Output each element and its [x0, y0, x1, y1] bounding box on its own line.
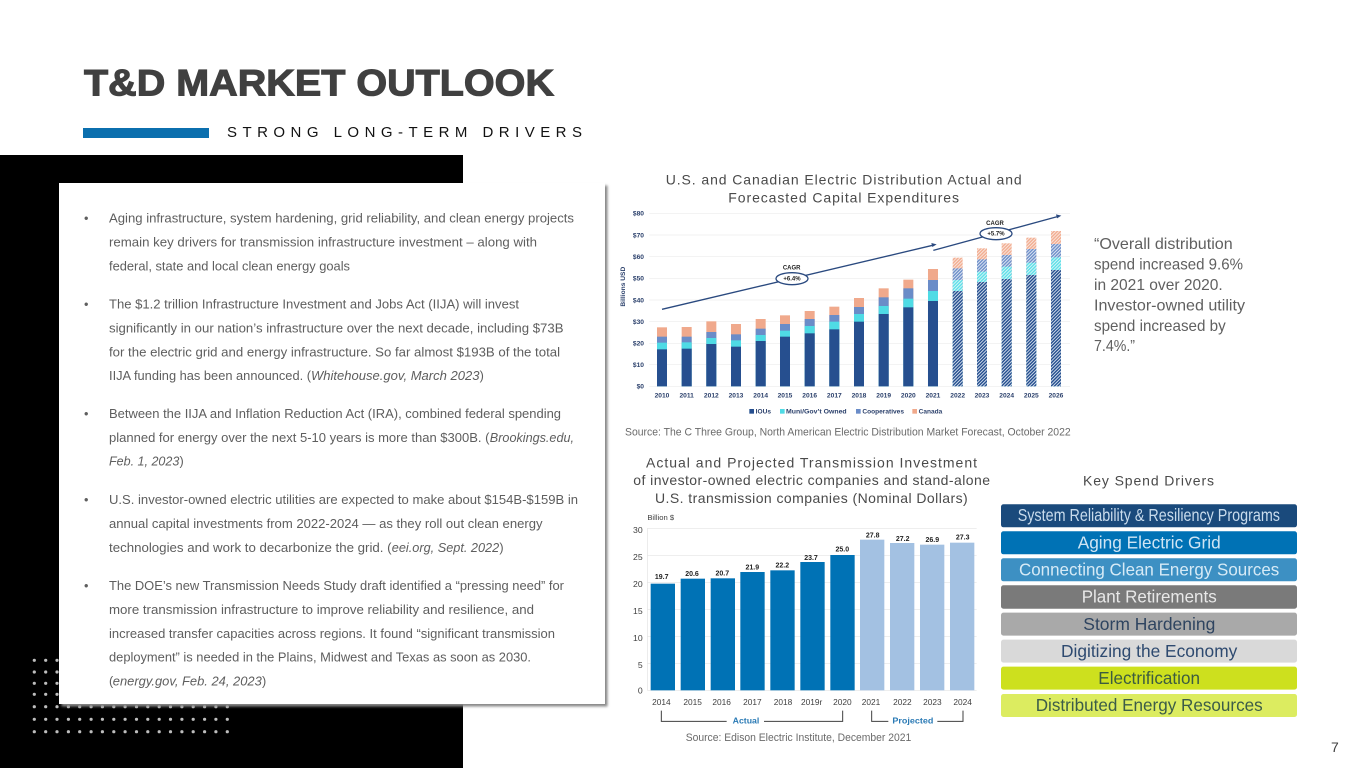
x axis labels — [652, 697, 972, 707]
subtitle: STRONG LONG-TERM DRIVERS — [227, 124, 582, 141]
bullet: IIJA: The $1.2 trillion Infrastructure Investment and Jobs Act (IIJA) will invest — [109, 298, 519, 312]
bar values: 21.9 — [746, 564, 759, 571]
driver 4 — [1001, 585, 1297, 609]
x axis labels: 2012 — [704, 393, 719, 400]
CAGR callout 6.4%: +6.4% — [783, 277, 801, 283]
bullet: IIJA and IRA: • — [84, 407, 88, 421]
bullet: IIJA and IRA — [84, 407, 574, 469]
heading: transmission chart: U.S. transmission companies (Nominal Dollars) — [655, 490, 968, 506]
bar values: 26.9 — [926, 537, 939, 544]
source: distribution chart: Source: The C Three Group, North American Electric Distribution Market Forecast, October 2022 — [625, 427, 1071, 439]
y axis labels: $40 — [633, 297, 644, 304]
x axis labels: 2026 — [1049, 393, 1064, 400]
accent bar — [83, 128, 209, 138]
x axis labels: 2016 — [802, 393, 817, 400]
y axis labels — [633, 525, 643, 695]
driver 5 — [1001, 613, 1297, 636]
chart: transmission investment — [633, 513, 977, 726]
bullet: IIJA — [84, 298, 564, 383]
bullet: aging infrastructure: Aging infrastructure, system hardening, grid reliability, and clean energy projects — [109, 212, 574, 226]
CAGR callout 5.7% — [980, 221, 1012, 240]
bullet: aging infrastructure — [84, 212, 574, 274]
x axis labels: 2021 — [862, 697, 881, 707]
bracket: actual — [661, 711, 843, 726]
x axis labels: 2011 — [679, 393, 694, 400]
x axis labels: 2019 — [876, 393, 891, 400]
driver 4: Plant Retirements — [1082, 587, 1217, 607]
y axis labels: $10 — [633, 362, 644, 369]
bullet: DOE study: more transmission infrastructure to improve reliability and resilience, and — [109, 603, 534, 617]
y axis labels: 0 — [638, 685, 643, 695]
quote callout — [1094, 236, 1245, 355]
bullet: IIJA: for the electric grid and energy infrastructure. So far almost $193B of the total — [109, 345, 560, 359]
heading: distribution chart — [666, 171, 1022, 206]
x axis labels: 2015 — [683, 697, 702, 707]
bullet: IIJA: significantly in our nation’s infrastructure over the next decade, including $73B — [109, 322, 564, 336]
legend: Muni/Gov’t Owned — [786, 409, 847, 416]
bracket: actual: Actual — [733, 716, 759, 726]
x axis labels: 2016 — [712, 697, 731, 707]
x axis labels: 2013 — [729, 393, 744, 400]
heading: transmission chart — [633, 455, 990, 506]
x axis labels: 2015 — [778, 393, 793, 400]
bullet: IIJA: IIJA funding has been announced. ( — [109, 369, 312, 383]
bullet: DOE study: increased transfer capacities across regions. It found “significant transmission — [109, 627, 555, 641]
panel: key drivers text — [59, 183, 605, 704]
bar values — [655, 532, 970, 581]
bar values: 22.2 — [776, 563, 789, 570]
heading: distribution chart: Forecasted Capital Expenditures — [728, 190, 959, 206]
bullet: investor-owned utilities: U.S. investor-owned electric utilities are expected to make about $154B-$159B in — [109, 493, 578, 507]
y axis labels: $80 — [633, 211, 644, 218]
driver 6 — [1001, 640, 1297, 663]
CAGR callout 5.7%: CAGR — [986, 221, 1004, 227]
legend — [749, 409, 943, 416]
driver 8: Distributed Energy Resources — [1036, 695, 1263, 715]
bar values: 27.8 — [866, 532, 880, 539]
x axis labels: 2018 — [774, 697, 793, 707]
x axis labels: 2022 — [893, 697, 912, 707]
bullet: DOE study — [84, 579, 565, 689]
bar values: 27.3 — [956, 534, 970, 541]
bullet: IIJA: Whitehouse.gov, March 2023 — [311, 369, 480, 383]
quote callout: spend increased 9.6% — [1094, 256, 1243, 273]
driver 2 — [1001, 531, 1297, 554]
bracket: projected: Projected — [892, 716, 933, 726]
y axis labels: 25 — [633, 552, 643, 562]
driver 3: Connecting Clean Energy Sources — [1019, 560, 1280, 580]
x axis labels: 2017 — [743, 697, 762, 707]
x axis labels: 2024 — [999, 393, 1014, 400]
actual bars — [657, 269, 938, 386]
x axis labels: 2018 — [852, 393, 867, 400]
bullet: investor-owned utilities — [84, 493, 578, 555]
driver 7 — [1001, 667, 1297, 690]
dot pattern — [33, 659, 229, 733]
heading: transmission chart: Actual and Projected Transmission Investment — [646, 455, 977, 471]
source: transmission chart: Source: Edison Electric Institute, December 2021 — [686, 732, 911, 744]
forecast hatched bars — [953, 231, 1061, 386]
driver 6: Digitizing the Economy — [1061, 641, 1238, 661]
y axis labels: $20 — [633, 341, 644, 348]
bracket: projected — [872, 711, 963, 726]
bullet: DOE study: deployment” is needed in the Plains, Midwest and Texas as soon as 2030. — [109, 651, 531, 665]
trend arrow 2022-2026 — [933, 214, 1061, 250]
bullet: IIJA and IRA: ) — [180, 455, 184, 469]
x axis labels: 2014 — [652, 697, 671, 707]
driver 1: System Reliability & Resiliency Programs — [1018, 505, 1280, 525]
unit label: Billion $ — [647, 513, 675, 522]
y axis labels: 15 — [633, 606, 643, 616]
y axis labels: $60 — [633, 254, 644, 261]
x axis labels: 2020 — [901, 393, 916, 400]
x axis labels: 2022 — [950, 393, 965, 400]
x axis labels: 2021 — [926, 393, 941, 400]
bar values: 20.7 — [716, 571, 729, 578]
driver 5: Storm Hardening — [1083, 614, 1215, 634]
bar values: 20.6 — [685, 571, 699, 578]
driver 2: Aging Electric Grid — [1078, 532, 1221, 552]
heading: Key Spend Drivers — [1083, 473, 1214, 489]
CAGR callout 6.4%: CAGR — [783, 266, 801, 272]
bullet: IIJA and IRA: Brookings.edu, — [490, 431, 574, 445]
panel: key spend drivers — [1001, 473, 1297, 717]
quote callout: Investor-owned utility — [1094, 298, 1245, 315]
bullet: aging infrastructure: federal, state and local clean energy goals — [109, 260, 350, 274]
x axis labels: 2020 — [833, 697, 852, 707]
bullet: investor-owned utilities: ) — [499, 541, 504, 555]
y axis labels — [633, 211, 644, 391]
heading: distribution chart: U.S. and Canadian Electric Distribution Actual and — [666, 171, 1022, 187]
bullet: DOE study: ) — [262, 675, 266, 689]
bar values: 27.2 — [896, 536, 910, 543]
bar values: 23.7 — [804, 555, 818, 562]
bullet: investor-owned utilities: • — [84, 493, 88, 507]
legend: Cooperatives — [862, 409, 904, 416]
y axis labels: $30 — [633, 319, 644, 326]
legend: IOUs — [756, 409, 771, 416]
quote callout: “Overall distribution — [1094, 236, 1233, 253]
x axis labels: 2019r — [801, 697, 823, 707]
y axis labels: $70 — [633, 232, 644, 239]
bullet: investor-owned utilities: technologies and work to decarbonize the grid. ( — [109, 541, 392, 555]
driver 8 — [1001, 694, 1297, 717]
trend arrow 2010-2021 — [662, 243, 937, 309]
bullet: investor-owned utilities: eei.org, Sept. 2022 — [392, 541, 499, 555]
legend: Canada — [919, 409, 943, 416]
page number: 7 — [1331, 739, 1339, 755]
y axis title: Billions USD — [620, 267, 627, 307]
x axis labels: 2014 — [753, 393, 768, 400]
y axis labels: $50 — [633, 276, 644, 283]
title: T&D MARKET OUTLOOK — [84, 62, 554, 104]
chart: distribution capital expenditures — [620, 211, 1070, 416]
CAGR callout 6.4% — [776, 266, 808, 285]
y axis labels: $0 — [637, 384, 644, 391]
x axis labels: 2024 — [953, 697, 972, 707]
y axis labels: 30 — [633, 525, 643, 535]
bullet: IIJA: ) — [480, 369, 484, 383]
bullet: investor-owned utilities: annual capital investments from 2022-2024 — as they roll out clean energy — [109, 517, 543, 531]
heading: transmission chart: of investor-owned electric companies and stand-alone — [633, 472, 990, 488]
CAGR callout 5.7%: +5.7% — [987, 232, 1005, 238]
quote callout: spend increased by — [1094, 318, 1226, 335]
driver 7: Electrification — [1098, 668, 1200, 688]
bullet: DOE study: The DOE’s new Transmission Needs Study draft identified a “pressing need” for — [109, 579, 565, 593]
bullet: IIJA: • — [84, 298, 88, 312]
bullet: aging infrastructure: • — [84, 212, 88, 226]
black background block — [0, 155, 463, 768]
x axis labels — [655, 393, 1064, 400]
y axis labels: 10 — [633, 633, 643, 643]
actual bars — [651, 555, 855, 690]
bullet: IIJA and IRA: planned for energy over the next 5-10 years is more than $300B. ( — [109, 431, 490, 445]
y axis labels: 5 — [638, 660, 643, 670]
x axis labels: 2023 — [923, 697, 942, 707]
bar values: 19.7 — [655, 574, 669, 581]
bullet: IIJA and IRA: Feb. 1, 2023 — [109, 455, 179, 469]
bullet: DOE study: energy.gov, Feb. 24, 2023 — [113, 675, 262, 689]
x axis labels: 2023 — [975, 393, 990, 400]
x axis labels: 2025 — [1024, 393, 1039, 400]
projected bars — [860, 540, 974, 690]
bar values: 25.0 — [836, 546, 849, 553]
bullet: IIJA and IRA: Between the IIJA and Inflation Reduction Act (IRA), combined federal spending — [109, 407, 561, 421]
x axis labels: 2010 — [655, 393, 670, 400]
bullet: DOE study: ( — [109, 675, 114, 689]
bullet: aging infrastructure: remain key drivers for transmission infrastructure investment – along with — [109, 236, 537, 250]
quote callout: 7.4%.” — [1094, 338, 1135, 355]
quote callout: in 2021 over 2020. — [1094, 277, 1223, 294]
x axis labels: 2017 — [827, 393, 842, 400]
bullet: DOE study: • — [84, 579, 88, 593]
y axis labels: 20 — [633, 579, 643, 589]
